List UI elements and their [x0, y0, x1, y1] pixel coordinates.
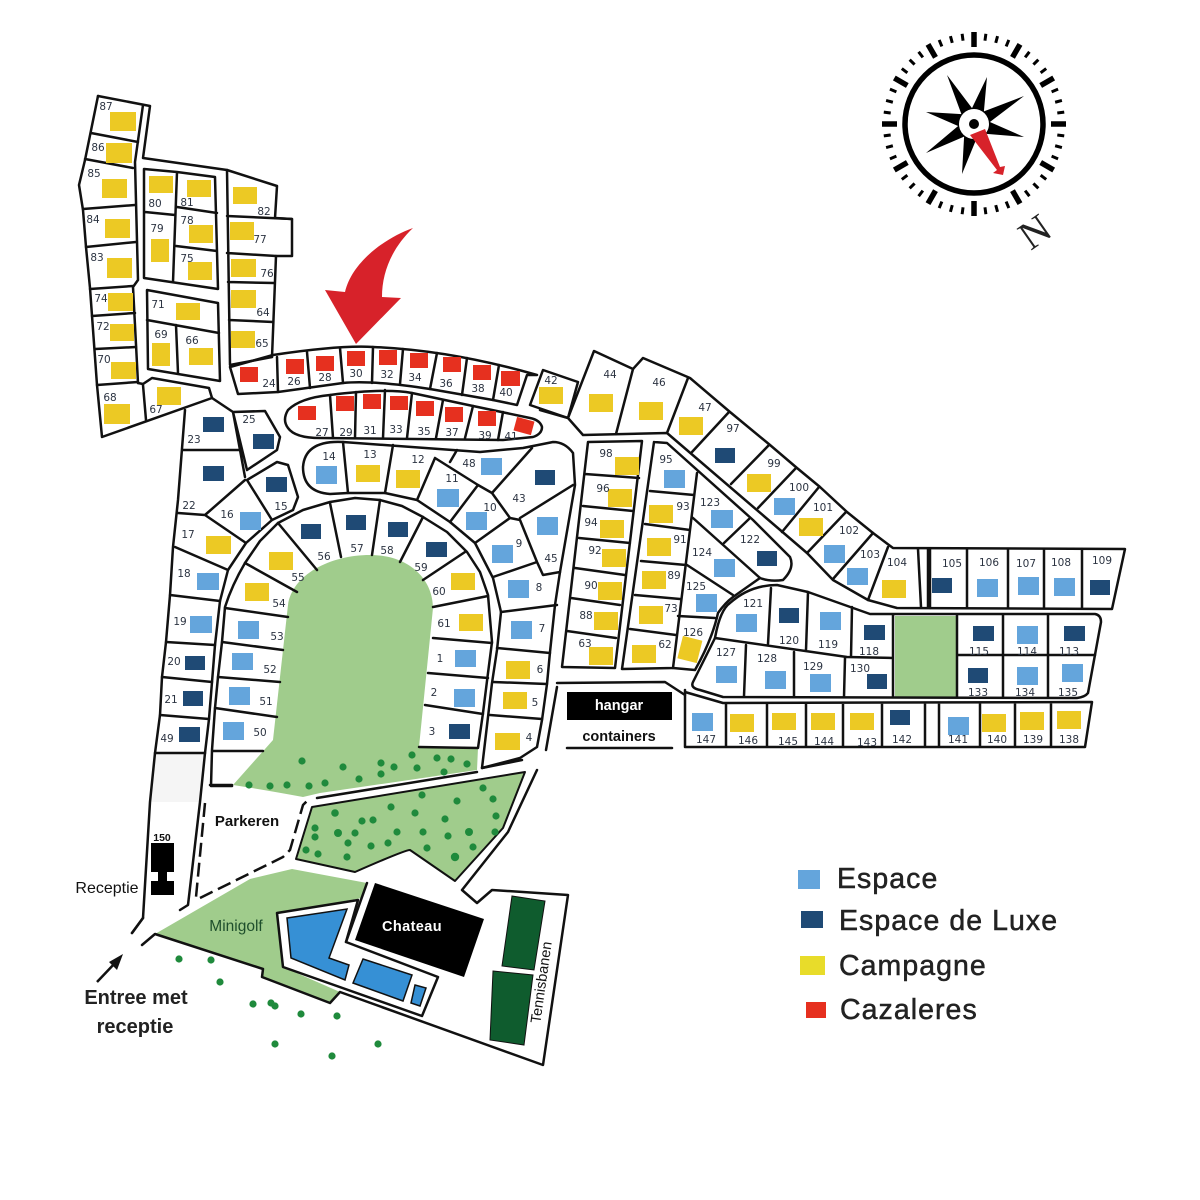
lot numbers: 119 — [818, 639, 838, 651]
legend: Campagne: Campagne — [839, 950, 987, 982]
lot numbers: 64 — [256, 307, 270, 319]
lot numbers: 146 — [738, 735, 758, 747]
lot numbers: 49 — [160, 733, 174, 745]
lot numbers: 12 — [411, 454, 425, 466]
lot numbers: 27 — [315, 427, 329, 439]
lot numbers: 4 — [526, 732, 533, 744]
lot numbers: 103 — [860, 549, 880, 561]
lot numbers: 82 — [257, 206, 271, 218]
lot numbers: 22 — [182, 500, 196, 512]
lot numbers: 107 — [1016, 558, 1036, 570]
lot numbers: 14 — [322, 451, 336, 463]
lot numbers: 98 — [599, 448, 613, 460]
lot numbers: 92 — [588, 545, 602, 557]
lot numbers: 91 — [673, 534, 687, 546]
lot numbers: 1 — [437, 653, 443, 665]
lot numbers: 29 — [339, 427, 353, 439]
lot numbers: 95 — [659, 454, 673, 466]
chateau: Chateau — [382, 919, 442, 935]
lot numbers: 26 — [287, 376, 301, 388]
trees outside minigolf — [175, 955, 382, 1060]
lot numbers: 66 — [185, 335, 199, 347]
lot numbers: 80 — [148, 198, 162, 210]
lot numbers: 33 — [389, 424, 403, 436]
lot numbers: 108 — [1051, 557, 1071, 569]
lot numbers: 90 — [584, 580, 598, 592]
lot numbers: 61 — [437, 618, 451, 630]
lot numbers: 99 — [767, 458, 781, 470]
lot numbers: 69 — [154, 329, 168, 341]
lot numbers: 101 — [813, 502, 833, 514]
lot numbers: 72 — [96, 321, 110, 333]
lot numbers: 87 — [99, 101, 113, 113]
lot numbers: 106 — [979, 557, 999, 569]
lot numbers: 16 — [220, 509, 234, 521]
lot numbers: 55 — [291, 572, 305, 584]
lot numbers: 86 — [91, 142, 105, 154]
lot numbers: 43 — [512, 493, 526, 505]
lot numbers: 71 — [151, 299, 165, 311]
lot numbers: 128 — [757, 653, 777, 665]
lot numbers: 138 — [1059, 734, 1079, 746]
lot numbers: 113 — [1059, 646, 1079, 658]
lot numbers: 68 — [103, 392, 117, 404]
lot numbers: 10 — [483, 502, 497, 514]
trees central park — [245, 751, 471, 790]
lot numbers: 3 — [429, 726, 435, 738]
lot numbers: 11 — [445, 473, 459, 485]
lot numbers: 134 — [1015, 687, 1035, 699]
lot numbers: 127 — [716, 647, 736, 659]
chateau — [355, 883, 484, 977]
lot numbers: 7 — [539, 623, 545, 635]
lot numbers: 34 — [408, 372, 422, 384]
legend: Cazaleres: Cazaleres — [840, 994, 978, 1026]
lot numbers: 126 — [683, 627, 703, 639]
reception label: Receptie — [75, 880, 139, 897]
lot numbers: 45 — [544, 553, 558, 565]
lot numbers: 144 — [814, 736, 834, 748]
lot numbers: 5 — [532, 697, 538, 709]
lot numbers: 105 — [942, 558, 962, 570]
lot numbers: 57 — [350, 543, 364, 555]
containers label: containers — [582, 729, 656, 745]
lot numbers: 54 — [272, 598, 286, 610]
lot numbers: 76 — [260, 268, 274, 280]
legend: Espace de Luxe: Espace de Luxe — [839, 905, 1058, 937]
lot numbers: 93 — [676, 501, 690, 513]
lot numbers: 88 — [579, 610, 593, 622]
minigolf label: Minigolf — [209, 918, 263, 935]
lot numbers: 102 — [839, 525, 859, 537]
lot numbers: 145 — [778, 736, 798, 748]
lot numbers: 120 — [779, 635, 799, 647]
lot numbers: 73 — [664, 603, 678, 615]
hangar box — [567, 692, 672, 720]
lot numbers: 2 — [431, 687, 437, 699]
hangar box: hangar — [595, 698, 644, 714]
lot numbers: 41 — [504, 431, 518, 443]
lot numbers: 20 — [167, 656, 181, 668]
lot numbers: 122 — [740, 534, 760, 546]
lot numbers: 60 — [432, 586, 446, 598]
lot numbers: 114 — [1017, 646, 1037, 658]
lot numbers: 123 — [700, 497, 720, 509]
lot numbers: 24 — [262, 378, 276, 390]
lot numbers: 13 — [363, 449, 377, 461]
lot numbers: 115 — [969, 646, 989, 658]
dashed parking boundary — [196, 800, 308, 898]
lot numbers: 8 — [536, 582, 542, 594]
road and lot lines — [79, 96, 1125, 1065]
lot numbers: 70 — [97, 354, 111, 366]
legend: Espace: Espace — [837, 863, 938, 895]
lot numbers: 38 — [471, 383, 485, 395]
lot numbers: 30 — [349, 368, 363, 380]
lot numbers: 36 — [439, 378, 453, 390]
lot numbers: 52 — [263, 664, 277, 676]
lot numbers: 9 — [516, 538, 522, 550]
lot numbers: 75 — [180, 253, 194, 265]
entrance label: Entree met — [84, 987, 188, 1009]
lot numbers: 44 — [603, 369, 617, 381]
Campagne lots (yellow) — [102, 112, 1081, 750]
minigolf green — [155, 869, 367, 1003]
lot numbers: 47 — [698, 402, 712, 414]
grey lots below 49 — [150, 753, 205, 802]
tennis courts — [490, 896, 545, 1045]
lot numbers: 46 — [652, 377, 666, 389]
lot numbers: 100 — [789, 482, 809, 494]
lot numbers: 23 — [187, 434, 201, 446]
lot numbers: 109 — [1092, 555, 1112, 567]
lot numbers: 142 — [892, 734, 912, 746]
lot numbers: 19 — [173, 616, 187, 628]
lot numbers: 77 — [253, 234, 267, 246]
building 150 reception — [151, 832, 174, 895]
legend — [798, 863, 1058, 1026]
lot numbers: 42 — [544, 375, 558, 387]
lot numbers: 139 — [1023, 734, 1043, 746]
lot numbers: 35 — [417, 426, 431, 438]
lot numbers: 104 — [887, 557, 907, 569]
lot numbers — [86, 101, 1112, 749]
lot numbers: 58 — [380, 545, 394, 557]
lot numbers: 141 — [948, 734, 968, 746]
lot numbers: 135 — [1058, 687, 1078, 699]
lot numbers: 84 — [86, 214, 100, 226]
red arrow pointing at lot 30 — [325, 228, 413, 344]
building 150 reception: 150 — [153, 832, 171, 844]
entrance label — [84, 987, 188, 1038]
lot numbers: 32 — [380, 369, 394, 381]
lot numbers: 63 — [578, 638, 592, 650]
lot numbers: 50 — [253, 727, 267, 739]
lot numbers: 74 — [94, 293, 108, 305]
lot numbers: 31 — [363, 425, 377, 437]
lot numbers: 96 — [596, 483, 610, 495]
lot numbers: 83 — [90, 252, 104, 264]
Espace de Luxe lots (navy) — [179, 417, 1110, 742]
lot numbers: 130 — [850, 663, 870, 675]
lot numbers: 121 — [743, 598, 763, 610]
compass — [882, 32, 1066, 216]
lot numbers: 15 — [274, 501, 288, 513]
lot numbers: 85 — [87, 168, 101, 180]
lot numbers: 67 — [149, 404, 163, 416]
lot numbers: 133 — [968, 687, 988, 699]
green park with trees south — [296, 772, 525, 881]
lot numbers: 97 — [726, 423, 740, 435]
entrance arrow — [97, 954, 123, 982]
lot numbers: 81 — [180, 197, 194, 209]
lot numbers: 37 — [445, 427, 459, 439]
lot numbers: 124 — [692, 547, 712, 559]
lot numbers: 62 — [658, 639, 672, 651]
pools — [287, 909, 426, 1006]
lot numbers: 59 — [414, 562, 428, 574]
lot numbers: 79 — [150, 223, 164, 235]
parking label: Parkeren — [215, 813, 279, 830]
lot numbers: 140 — [987, 734, 1007, 746]
lot numbers: 53 — [270, 631, 284, 643]
lot numbers: 18 — [177, 568, 191, 580]
green square east — [895, 616, 957, 697]
lot numbers: 89 — [667, 570, 681, 582]
lot numbers: 65 — [255, 338, 269, 350]
lot numbers: 147 — [696, 734, 716, 746]
lot numbers: 125 — [686, 581, 706, 593]
lot numbers: 25 — [242, 414, 256, 426]
Cazaleres lots (red) — [240, 350, 535, 435]
Espace lots (blue) — [190, 458, 1083, 740]
lot numbers: 143 — [857, 737, 877, 749]
lot numbers: 28 — [318, 372, 332, 384]
lot numbers: 21 — [164, 694, 178, 706]
lot numbers: 51 — [259, 696, 273, 708]
lot numbers: 6 — [537, 664, 544, 676]
lot numbers: 40 — [499, 387, 513, 399]
tennis label: Tennisbanen — [528, 941, 556, 1024]
lot numbers: 39 — [478, 430, 492, 442]
lot numbers: 94 — [584, 517, 598, 529]
lot numbers: 56 — [317, 551, 331, 563]
trees south park — [302, 784, 500, 861]
minigolf and pool frame — [277, 883, 438, 1016]
lot numbers: 17 — [181, 529, 195, 541]
lot numbers: 48 — [462, 458, 476, 470]
lot numbers: 118 — [859, 646, 879, 658]
lot numbers: 129 — [803, 661, 823, 673]
entrance label: receptie — [97, 1016, 173, 1038]
north letter: N — [1010, 205, 1059, 258]
lot numbers: 78 — [180, 215, 194, 227]
green park central — [233, 555, 478, 797]
